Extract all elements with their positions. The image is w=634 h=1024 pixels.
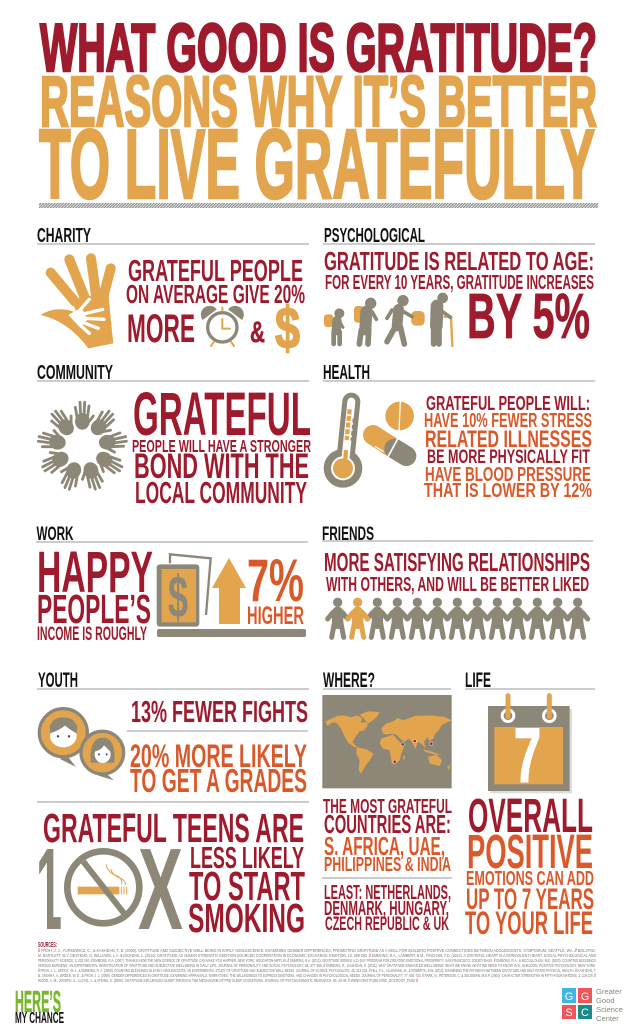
countries text: COUNTRIES ARE:: [324, 811, 451, 839]
sources: [38, 942, 597, 983]
panel: work: $: [168, 564, 188, 630]
logo: greater good science center: G: [581, 991, 589, 1003]
charity text: GRATEFUL PEOPLE: [128, 254, 303, 288]
smoking text: [188, 841, 305, 941]
icon: calendar: 7: [514, 713, 541, 799]
icon: thermometer: [324, 402, 362, 488]
stat: 7% higher: HIGHER: [247, 602, 304, 630]
charity text: MORE: [127, 307, 195, 351]
heading: health: HEALTH: [323, 362, 370, 384]
logo: greater good science center: S: [565, 1007, 573, 1019]
community text: GRATEFUL: [133, 380, 311, 448]
heading: charity: CHARITY: [37, 225, 91, 247]
sources: PERSONALITY SCIENCE, 3, 232-240. // EMMONS, R.A. (2007). THANKS! HOW THE NEW SCIENCE OF GRATITUDE CAN MAKE YOU HAPPIER. NEW YORK: HOUGHTON-MIFFLIN. // EMMONS, R.A. (2013). GRATITUDE WORKS! A 21-DAY PROGRAM FOR CREATING EMOTIONAL PROSPERITY. SAN FRANCISCO: JOSSEY-BASS. // EMMONS, R.A., & MCCULLOUGH, M.E. (2003). COUNTING BLESSINGS: [38, 958, 596, 963]
stat: 10X with no smoking icon: 1: [36, 824, 62, 954]
smoking text: LESS LIKELY: [190, 841, 304, 875]
stat: 7% higher: 7%: [247, 547, 304, 614]
heading: life: LIFE: [465, 669, 491, 692]
heading: where: WHERE?: [323, 669, 375, 692]
countries text: PHILIPPINES & INDIA: [324, 853, 451, 876]
panel: psychological: [323, 225, 595, 352]
youth stats: [127, 695, 308, 799]
work text: INCOME IS ROUGHLY: [37, 624, 147, 645]
heading: community: COMMUNITY: [37, 362, 113, 384]
logo: greater good science center: C: [581, 1007, 589, 1019]
countries text: S. AFRICA, UAE,: [324, 831, 445, 861]
health text: [424, 392, 592, 502]
logo: greater good science center: Science: [596, 1005, 623, 1014]
work text: PEOPLE’S: [37, 586, 151, 632]
logo: greater good science center: Center: [596, 1014, 619, 1023]
community text: PEOPLE WILL HAVE A STRONGER: [132, 436, 311, 456]
icon: chain of people: [328, 598, 588, 637]
work text: [37, 540, 153, 645]
charity text: [126, 254, 305, 351]
heading: youth: YOUTH: [38, 669, 78, 692]
icon: pills: [373, 400, 414, 459]
life text: [465, 790, 594, 941]
community text: [132, 380, 311, 510]
icon: alarm clock: [201, 306, 244, 346]
world map: [322, 695, 452, 788]
panel: life: [465, 669, 595, 941]
sources: SOURCES:: [38, 942, 57, 949]
logo: greater good science center: Greater: [596, 987, 622, 996]
stat: 7% higher: [247, 547, 304, 630]
friends text: [324, 547, 590, 596]
logo: greater good science center: [562, 987, 623, 1023]
icon: four ages of people: [324, 293, 452, 346]
stat: 10X with no smoking icon: X: [138, 824, 183, 954]
panel: youth: [36, 669, 309, 954]
stat: 10X with no smoking icon: [39, 848, 182, 929]
charity text: &: [250, 316, 265, 349]
smoking text: TO START: [189, 863, 305, 909]
heading: work: WORK: [36, 524, 74, 545]
youth stats: TO GET A GRADES: [130, 762, 307, 799]
icon: circle of hands: [37, 402, 128, 492]
psychological text: [324, 246, 594, 352]
community text: BOND WITH THE: [134, 447, 309, 486]
panel: work: [36, 524, 308, 645]
logo: greater good science center: G: [565, 991, 573, 1003]
youth stats: 13% FEWER FIGHTS: [131, 695, 308, 729]
smoking text: SMOKING: [188, 895, 305, 941]
community text: LOCAL COMMUNITY: [135, 476, 307, 510]
logo: here's my chance: [15, 984, 64, 1024]
panel: friends: [322, 524, 593, 637]
logo: greater good science center: Good: [596, 996, 615, 1005]
countries text: THE MOST GRATEFUL: [323, 795, 452, 818]
icon: up arrow: [212, 558, 246, 624]
youth headline: GRATEFUL TEENS ARE: [43, 805, 304, 851]
panel: community: [37, 362, 311, 510]
countries text: CZECH REPUBLIC & UK: [325, 914, 449, 935]
heading: friends: FRIENDS: [322, 524, 374, 545]
sources: WOOD, A. M., JOSEPH, S., LLOYD, J., & ATKINS, S. (2009). GRATITUDE INFLUENCES SLEEP THROUGH THE MECHANISM OF PRE-SLEEP COGNITIONS. JOURNAL OF PSYCHOSOMATIC RESEARCH, 66, 43-48. // WWW.GRATITUDE.ORG/_DOCROOT_PAGE //: [38, 978, 418, 983]
title: [39, 10, 597, 219]
heading: psychological: PSYCHOLOGICAL: [324, 225, 425, 247]
panel: where: [322, 669, 452, 935]
text: HERE’S: [15, 984, 61, 1019]
icon: speech bubble faces: [39, 709, 124, 780]
countries text: [322, 795, 452, 935]
icon: calendar: [488, 696, 572, 799]
panel: charity: [37, 225, 309, 361]
work text: HAPPY: [37, 540, 153, 605]
charity text: ON AVERAGE GIVE 20%: [126, 279, 305, 309]
panel: health: [323, 362, 595, 502]
youth stats: 20% MORE LIKELY: [130, 738, 307, 774]
countries text: DENMARK, HUNGARY,: [324, 897, 449, 920]
countries text: LEAST: NETHERLANDS,: [324, 881, 451, 904]
icon: giving hand: [41, 258, 113, 348]
icon: money bills: [157, 554, 211, 627]
icon: dollar sign: $: [275, 296, 300, 361]
